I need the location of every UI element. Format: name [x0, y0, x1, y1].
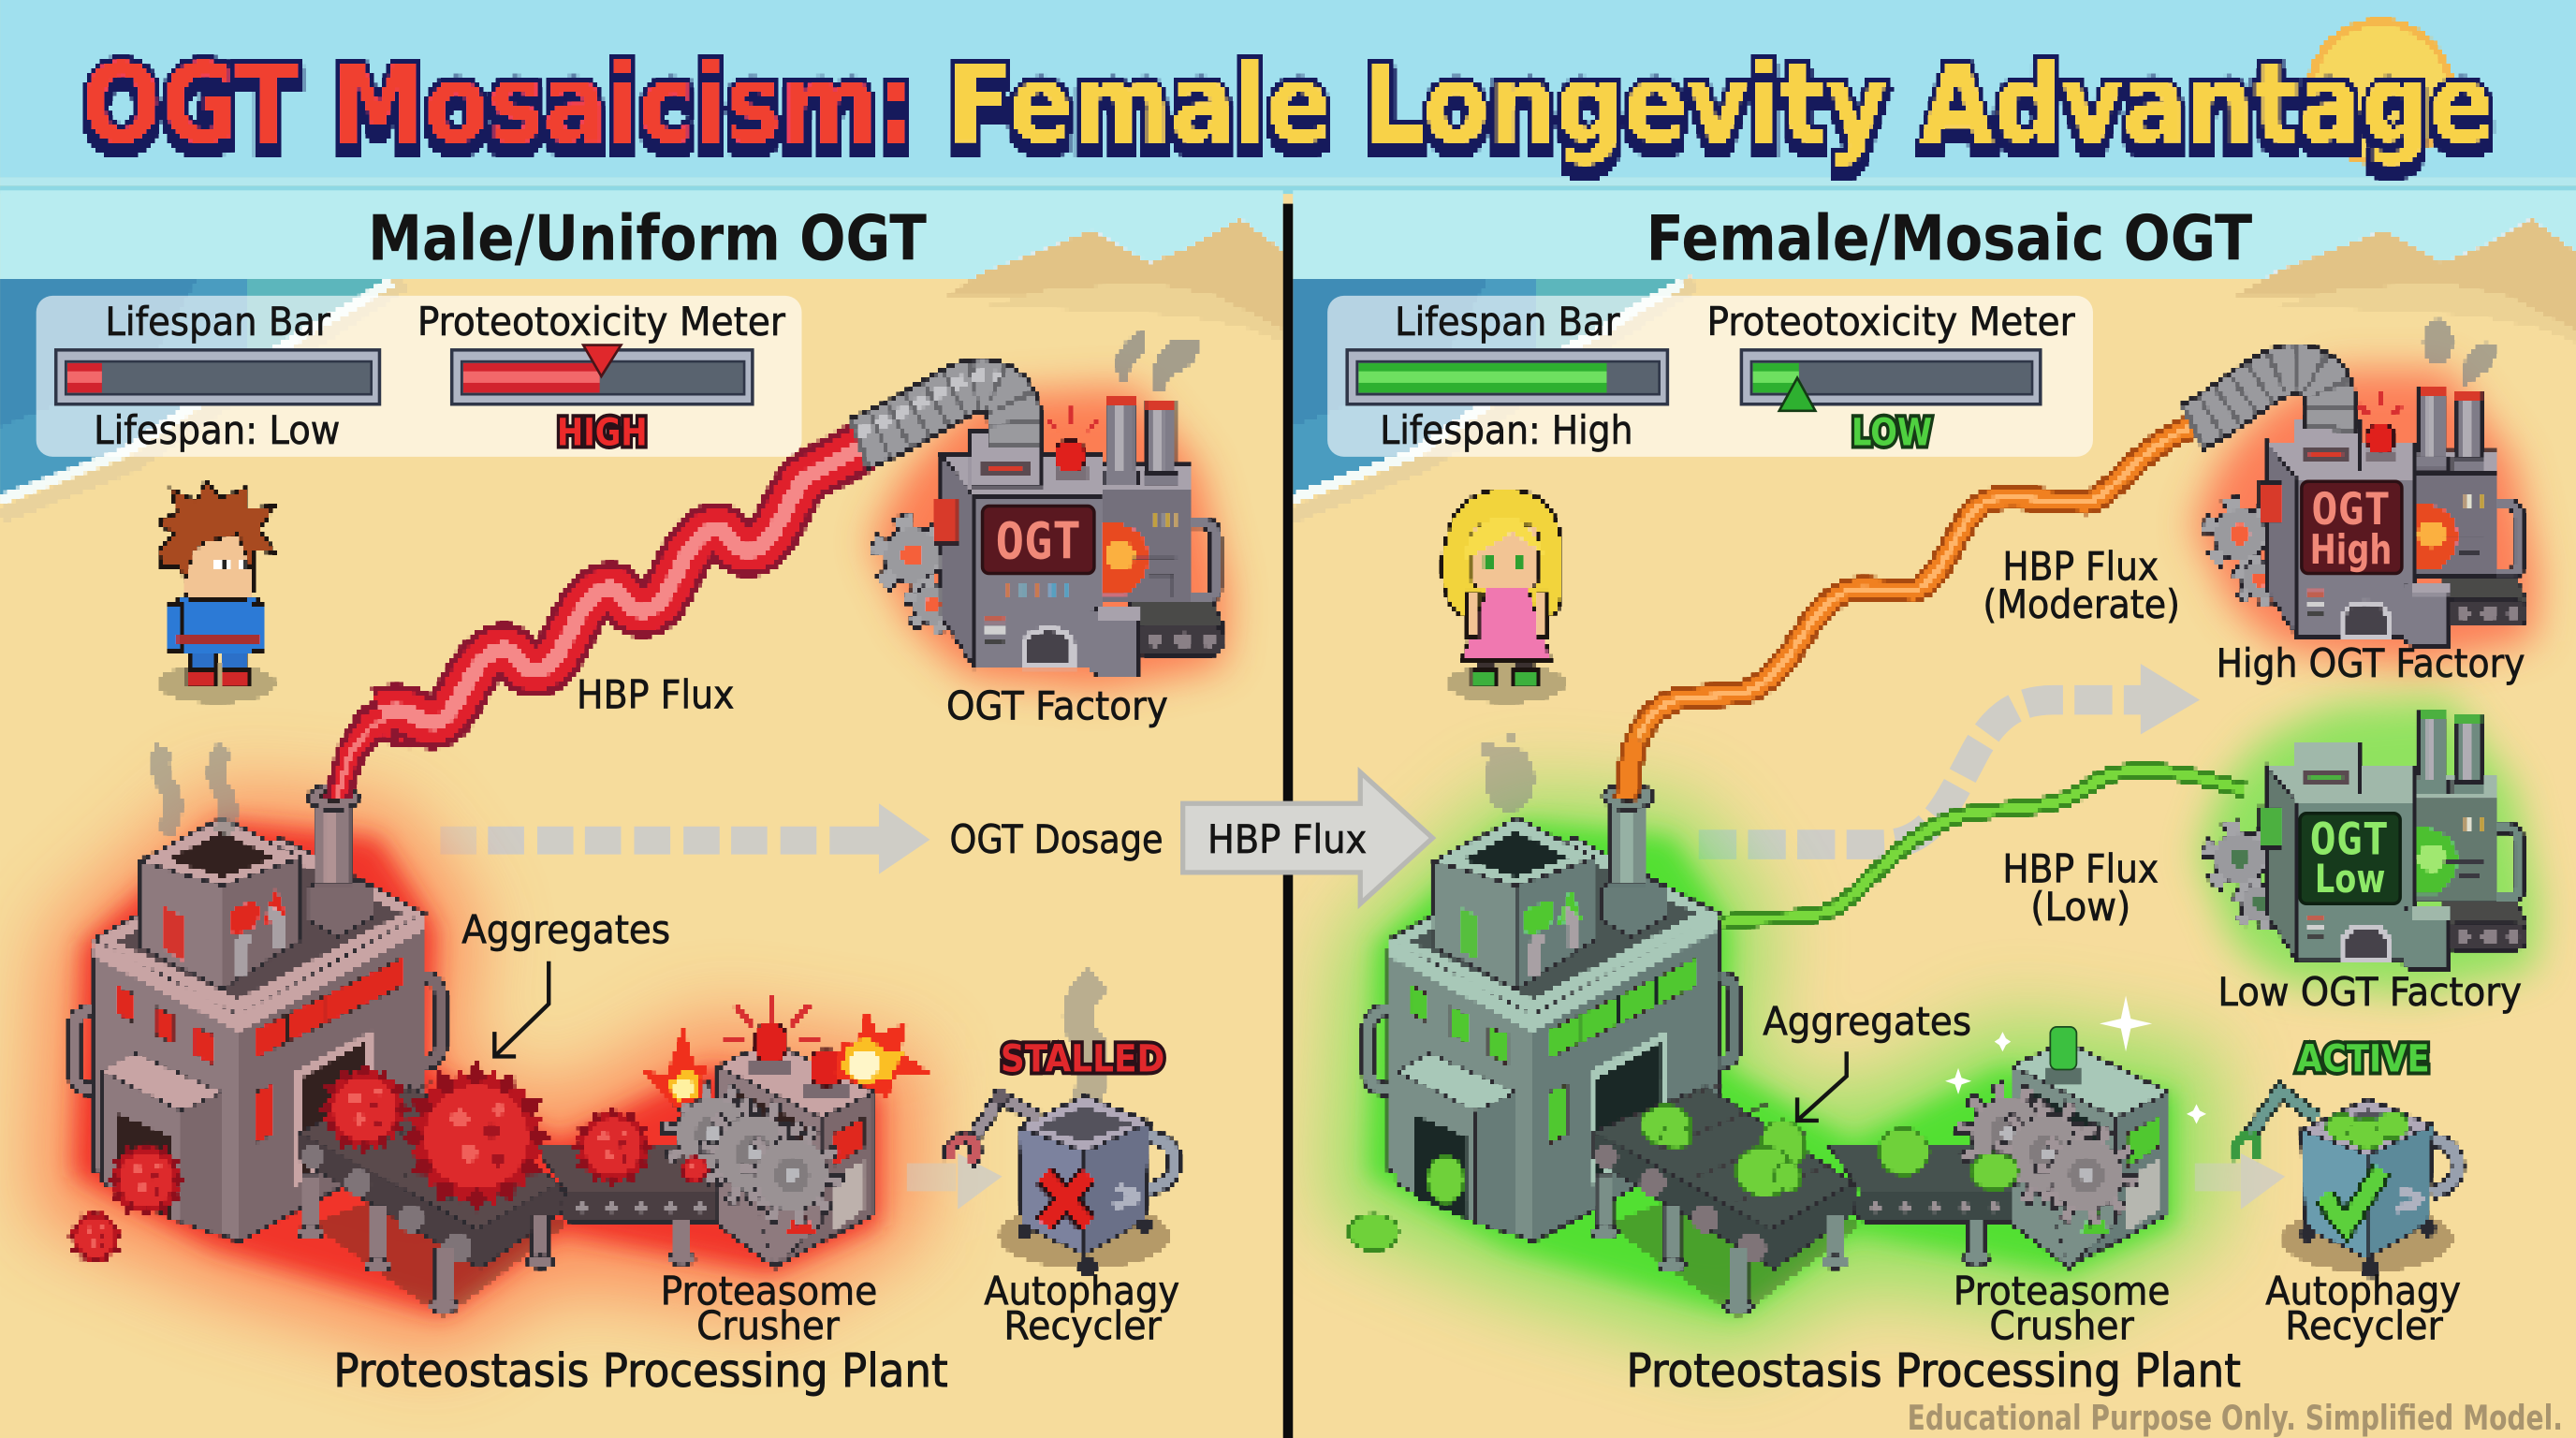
- autophagy recycler: stalled: [949, 1090, 1175, 1275]
- label: HBP flux low: [2002, 845, 2159, 930]
- aggregates: red spiky: [64, 1052, 711, 1269]
- OGT screen: OGT: [996, 512, 1081, 571]
- status panel: female: [1327, 296, 2093, 457]
- OGT high screen: High: [2310, 526, 2392, 574]
- arrow: OGT dosage: [440, 803, 929, 874]
- OGT low screen: [2300, 814, 2400, 903]
- panel: female mosaic OGT: [1292, 192, 2576, 1438]
- label: autophagy recycler: Autophagy: [984, 1268, 1179, 1313]
- label: HBP flux low: HBP Flux: [2002, 845, 2159, 891]
- autophagy recycler: active: [2236, 1091, 2458, 1278]
- label: proteotoxicity meter: Proteotoxicity Meter: [1707, 299, 2075, 345]
- label: lifespan bar: Lifespan Bar: [1395, 299, 1620, 345]
- proteotoxicity meter: [452, 345, 753, 404]
- aggregates: green blobs: [1349, 1106, 2017, 1251]
- label: proteasome crusher: Crusher: [1989, 1302, 2134, 1348]
- label: processing plant: Proteostasis Processing Plant: [333, 1343, 948, 1398]
- label: HBP flux low: (Low): [2030, 884, 2130, 930]
- label: proteasome crusher: [661, 1268, 877, 1348]
- header background: [0, 0, 2576, 194]
- OGT low screen: Low: [2315, 856, 2385, 902]
- label: proteotoxicity meter: Proteotoxicity Meter: [417, 299, 786, 345]
- OGT low screen: OGT: [2310, 814, 2389, 866]
- label: low OGT factory: Low OGT Factory: [2217, 969, 2522, 1015]
- label: lifespan high: Lifespan: High: [1380, 407, 1633, 453]
- recycler smoke: [1077, 979, 1097, 1110]
- character: boy: [158, 481, 276, 703]
- label: HBP flux moderate: [1983, 544, 2180, 627]
- arrow: aggregates pointer: [1797, 1051, 1847, 1121]
- label: proteasome crusher: Proteasome: [1954, 1268, 2170, 1313]
- divider: [1283, 204, 1293, 1438]
- label: autophagy recycler: Autophagy: [2265, 1268, 2461, 1313]
- OGT factory: [879, 396, 1224, 677]
- status: low: LOW: [1852, 411, 1932, 455]
- proteotoxicity meter: [1741, 350, 2041, 411]
- icon: sun: [2306, 18, 2454, 166]
- low OGT factory: [2209, 712, 2527, 970]
- panel heading: male: Male/Uniform OGT: [368, 201, 927, 274]
- label: autophagy recycler: Recycler: [2285, 1302, 2443, 1348]
- proteostasis plant: red: [74, 784, 874, 1318]
- label: HBP flux: HBP Flux: [577, 671, 735, 717]
- label: proteasome crusher: [1954, 1268, 2170, 1348]
- title: OGT Mosaicism:: [82, 41, 915, 168]
- label: HBP flux moderate: (Moderate): [1983, 581, 2180, 627]
- title: OGT Mosaicism:: [82, 51, 915, 177]
- label: autophagy recycler: [2265, 1268, 2461, 1348]
- panel heading: female: Female/Mosaic OGT: [1647, 201, 2253, 274]
- status: active: ACTIVE: [2297, 1036, 2430, 1080]
- status panel: male: [37, 296, 802, 457]
- arrow: aggregates pointer: [494, 961, 549, 1056]
- label: proteasome crusher: Proteasome: [661, 1268, 877, 1313]
- heat glow: plant: [1327, 788, 2215, 1356]
- label: aggregates: Aggregates: [1763, 999, 1971, 1045]
- heat glow: high OGT factory: [2193, 370, 2539, 666]
- panel: male uniform OGT: [0, 192, 1298, 1438]
- arrow: faded to recycler: [907, 1153, 1003, 1210]
- alarm beacons and explosions: [644, 996, 929, 1108]
- heat glow: low OGT factory: [2198, 698, 2539, 994]
- label: OGT dosage: OGT Dosage: [949, 816, 1164, 862]
- plant smoke: [160, 748, 228, 833]
- label: HBP flux moderate: HBP Flux: [2002, 544, 2159, 590]
- label: autophagy recycler: [984, 1268, 1179, 1348]
- flux wave: moderate orange: [1627, 422, 2204, 800]
- flux wave: red HBP flux: [324, 440, 871, 800]
- status: stalled: STALLED: [1001, 1036, 1164, 1080]
- label: autophagy recycler: Recycler: [1003, 1302, 1163, 1348]
- beacon and sparkles: [1945, 996, 2206, 1123]
- high OGT factory: [2209, 388, 2527, 646]
- factory pipe: [2191, 369, 2331, 431]
- label: OGT factory: OGT Factory: [946, 683, 1168, 729]
- proteostasis plant: green: [1368, 784, 2169, 1318]
- alarm beacon: factory: [1048, 407, 1097, 481]
- factory smoke: [1116, 332, 1199, 391]
- factory smoke: [2423, 318, 2497, 388]
- center arrow: HBP flux: [1183, 772, 1432, 903]
- factory pipe: [857, 375, 1016, 447]
- label: lifespan bar: Lifespan Bar: [105, 299, 330, 345]
- OGT high screen: [2302, 481, 2402, 574]
- label: high OGT factory: High OGT Factory: [2217, 640, 2525, 686]
- heat glow: OGT factory: [871, 386, 1229, 690]
- label: lifespan low: Lifespan: Low: [94, 407, 340, 453]
- label: proteasome crusher: Crusher: [696, 1302, 840, 1348]
- flux wave: low green: [1721, 770, 2244, 923]
- character: girl: [1442, 490, 1566, 703]
- OGT high screen: OGT: [2311, 484, 2391, 536]
- alarm beacon: factory: [2359, 391, 2402, 463]
- plant smoke: [1480, 731, 1534, 812]
- heat glow: plant: [33, 788, 920, 1356]
- lifespan bar: [56, 350, 379, 404]
- lifespan bar: [1347, 350, 1667, 404]
- center arrow: HBP flux: HBP Flux: [1208, 816, 1367, 862]
- title: [82, 41, 2494, 177]
- label: aggregates: Aggregates: [461, 906, 670, 952]
- flux wave: orange stack stub: [1627, 740, 1636, 800]
- label: processing plant: Proteostasis Processing Plant: [1627, 1343, 2241, 1398]
- status: high: HIGH: [557, 411, 648, 455]
- arrow: faded to recycler: [2195, 1153, 2285, 1210]
- arrow: OGT dosage curved: [1699, 664, 2200, 844]
